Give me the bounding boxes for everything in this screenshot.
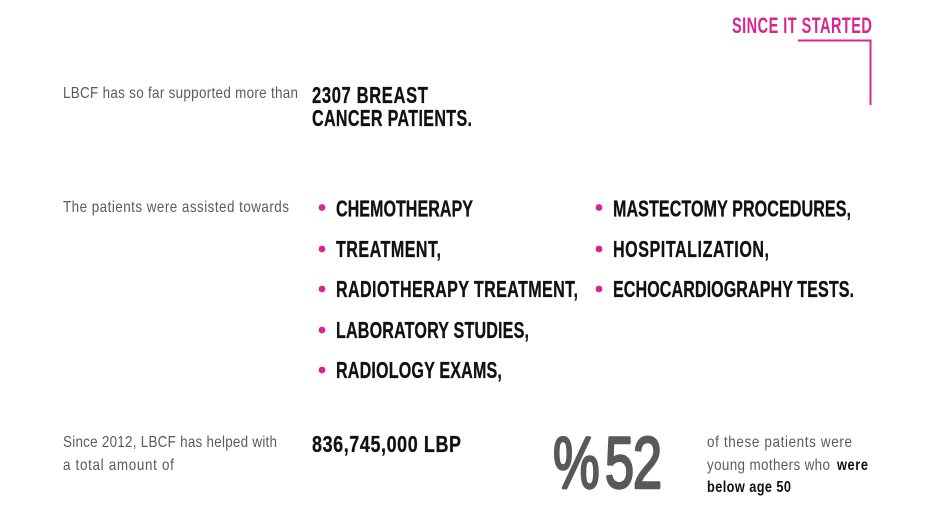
list: left column of treatments: TREATMENT, (336, 237, 441, 263)
list: left column of treatments (319, 197, 578, 384)
stat: total amount in LBP: 836,745,000 LBP (312, 432, 461, 458)
list: left column of treatments: RADIOLOGY EXAMS, (336, 358, 502, 384)
text: total amount label: a total amount of (63, 457, 175, 474)
text: young mothers note: were (836, 457, 868, 474)
stat: 2307 breast cancer patients: 2307 BREAST (312, 83, 429, 109)
list: left column of treatments: LABORATORY STUDIES, (336, 318, 529, 344)
text: total amount label: Since 2012, LBCF has helped with (63, 434, 277, 451)
text: young mothers note (707, 434, 868, 496)
text: total amount label (63, 434, 277, 474)
text: assistance label: The patients were assisted towards (63, 199, 289, 216)
text: young mothers note: of these patients were (707, 434, 852, 451)
text: young mothers note: below age 50 (707, 479, 791, 496)
heading: since it started: SINCE IT STARTED (732, 13, 872, 38)
stat: 2307 breast cancer patients: CANCER PATIENTS. (312, 106, 472, 132)
list: left column of treatments: RADIOTHERAPY TREATMENT, (336, 277, 578, 303)
list: right column of treatments (596, 197, 854, 303)
list: left column of treatments: CHEMOTHERAPY (336, 197, 473, 222)
list: right column of treatments: HOSPITALIZATION, (613, 237, 769, 263)
stat: 2307 breast cancer patients (312, 83, 472, 132)
stat: 52 percent: %52 (553, 423, 662, 504)
list: right column of treatments: ECHOCARDIOGRAPHY TESTS. (613, 277, 854, 303)
text: young mothers note: young mothers who (707, 457, 830, 474)
heading: since it started (732, 13, 872, 105)
list: right column of treatments: MASTECTOMY PROCEDURES, (613, 197, 851, 222)
text: supported patients label: LBCF has so far supported more than (63, 85, 298, 102)
